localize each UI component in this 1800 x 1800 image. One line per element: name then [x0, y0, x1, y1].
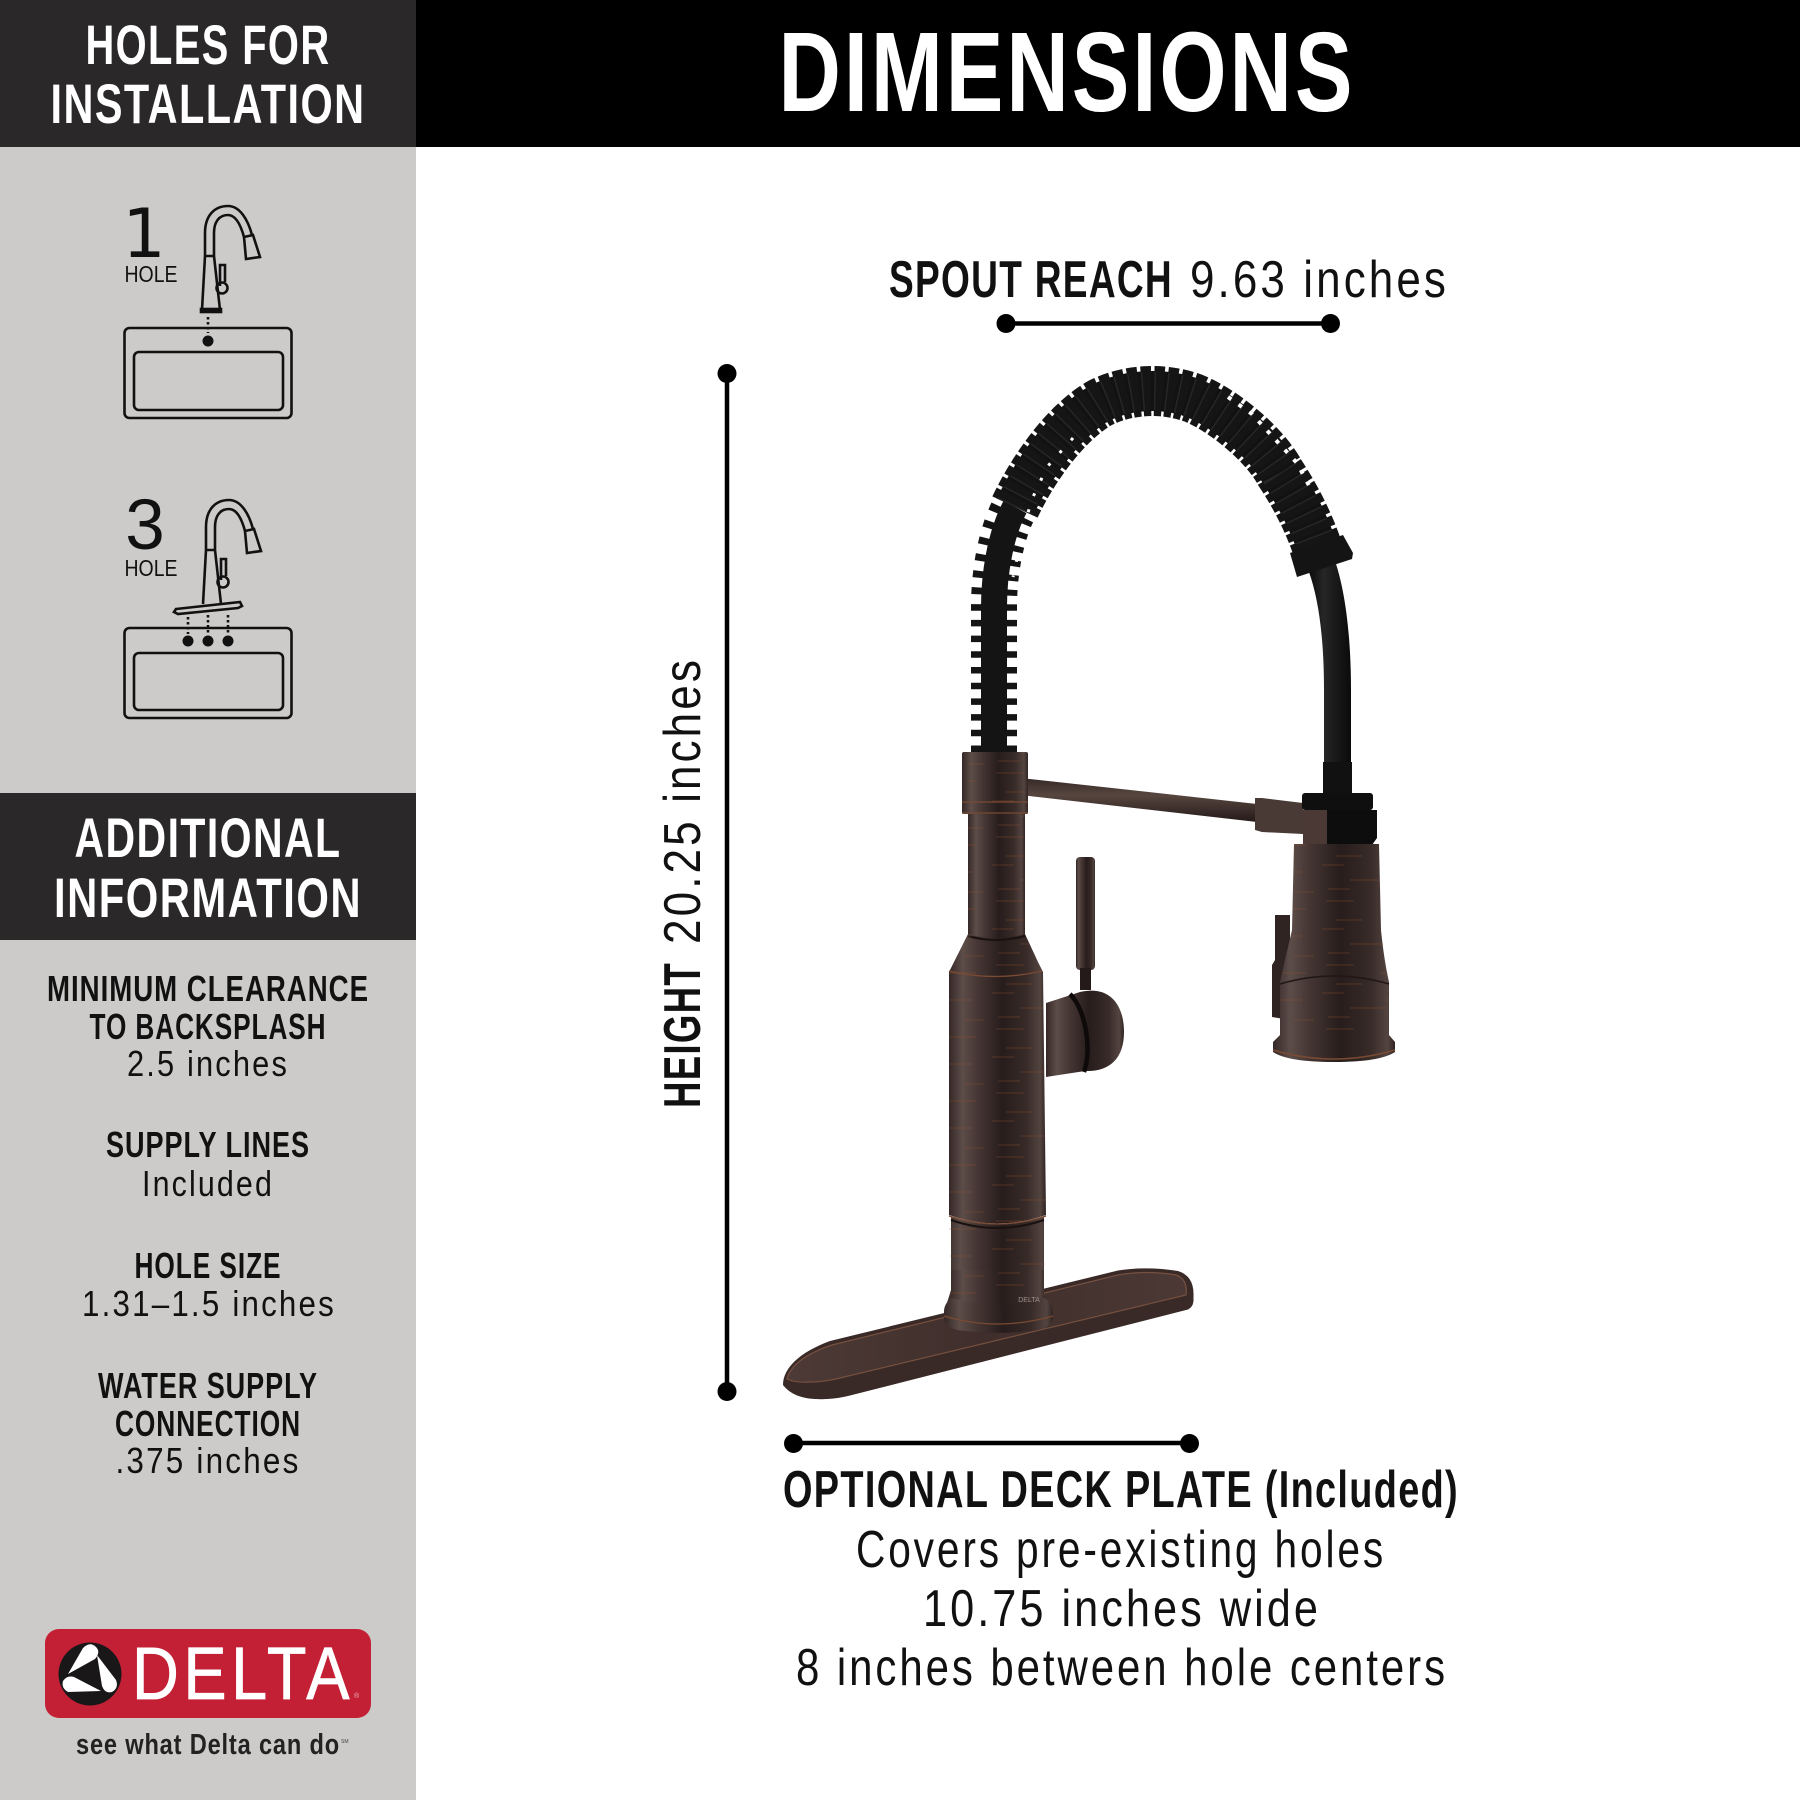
text block: water supply connection: .375 inches [116, 1440, 300, 1481]
logo: Delta: SM [341, 1739, 348, 1745]
text block: supply lines: Included [142, 1163, 274, 1204]
text block: minimum clearance [47, 968, 369, 1084]
text block: water supply connection: WATER SUPPLY [98, 1365, 318, 1406]
text block: water supply connection [98, 1365, 318, 1481]
text block: minimum clearance: TO BACKSPLASH [90, 1006, 326, 1047]
dimension: height: HEIGHT [654, 962, 712, 1108]
logo: Delta: see what Delta can do [76, 1729, 340, 1761]
text block: hole size [82, 1245, 336, 1324]
icon: three hole installation: 3 [125, 486, 165, 565]
logo: Delta: DELTA [132, 1632, 354, 1715]
deck plate [783, 1268, 1194, 1399]
text block: water supply connection: CONNECTION [115, 1403, 301, 1444]
title banner [416, 0, 1800, 147]
logo: Delta [45, 1629, 371, 1761]
pivot bar [1010, 777, 1257, 822]
faucet base over plate [944, 1270, 1053, 1333]
text block: optional deck plate: 8 inches between hole centers [796, 1639, 1448, 1697]
logo: Delta: ® [354, 1692, 360, 1700]
dimension: deck plate bar [784, 1434, 1199, 1453]
column and body [946, 752, 1048, 1306]
heading: additional information: ADDITIONAL [74, 806, 342, 869]
dimension: height: 20.25 inches [654, 657, 712, 944]
icon: one hole installation [122, 195, 292, 418]
hose and head collar [1309, 564, 1351, 770]
text block: supply lines [106, 1124, 310, 1204]
icon: one hole installation: 1 [122, 195, 166, 274]
icon: three hole installation: HOLE [124, 555, 178, 581]
text block: optional deck plate: 10.75 inches wide [923, 1580, 1321, 1638]
heading: additional information: INFORMATION [54, 866, 362, 929]
heading: additional information [0, 793, 416, 940]
spray head [1272, 844, 1395, 1062]
text block: optional deck plate [783, 1461, 1459, 1697]
icon: one hole installation: HOLE [124, 261, 178, 287]
lever handle [1046, 857, 1124, 1077]
text block: hole size: HOLE SIZE [134, 1245, 282, 1286]
text block: minimum clearance: 2.5 inches [127, 1043, 289, 1084]
text block: supply lines: SUPPLY LINES [106, 1124, 310, 1165]
faucet product image: DELTA [1018, 1297, 1040, 1304]
text block: hole size: 1.31–1.5 inches [82, 1283, 336, 1324]
icon: three hole installation [124, 486, 292, 718]
spring coil [994, 391, 1318, 752]
heading: holes for installation: HOLES FOR [86, 13, 330, 76]
text block: optional deck plate: Covers pre-existing holes [856, 1521, 1386, 1579]
faucet product image [783, 391, 1395, 1399]
text block: minimum clearance: MINIMUM CLEARANCE [47, 968, 369, 1009]
dimension: spout reach: 9.63 inches [1190, 251, 1449, 309]
title banner: DIMENSIONS [778, 9, 1356, 135]
text block: optional deck plate: OPTIONAL DECK PLATE (Included) [783, 1461, 1459, 1519]
brushed finish streaks [949, 752, 1389, 1298]
panel: left sidebar [0, 0, 416, 1800]
heading: holes for installation: INSTALLATION [50, 72, 366, 135]
dimension: spout reach: SPOUT REACH [889, 251, 1173, 309]
heading: holes for installation [0, 0, 416, 147]
dimension: spout reach [889, 251, 1449, 333]
dimension: height [654, 364, 736, 1401]
